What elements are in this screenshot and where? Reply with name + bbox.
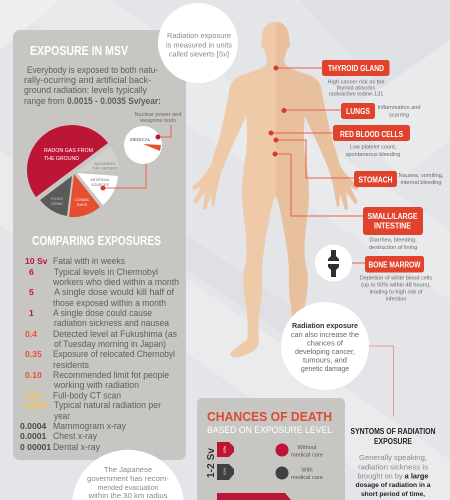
label: small/large intestine: SMALL/LARGE bbox=[368, 212, 418, 221]
label: small/large intestine: Diarrhea, bleeding, bbox=[369, 238, 417, 244]
legend: with medical care: With bbox=[301, 468, 313, 474]
bar: next exposure level bbox=[217, 493, 291, 500]
list: dose descriptions: Recommended limit fot people bbox=[53, 369, 169, 380]
note: nuclear power and weapons tests bbox=[135, 112, 181, 124]
text: symptoms description: brought on by a large bbox=[358, 474, 429, 480]
label: lungs: LUNGS bbox=[346, 107, 371, 116]
list: dose descriptions: of Tuesday morning in Japan) bbox=[54, 338, 166, 349]
list: dose values: 0.4 bbox=[25, 329, 37, 339]
list: dose descriptions: residents bbox=[53, 359, 89, 370]
label: red blood cells bbox=[333, 125, 410, 158]
heading: symptoms of radiation exposure: EXPOSURE bbox=[374, 437, 413, 446]
label: stomach bbox=[354, 171, 444, 187]
heading: exposure in msv: EXPOSURE IN MSV bbox=[30, 43, 128, 58]
text: symptoms description: radiation sickness is bbox=[358, 462, 428, 472]
label: bone marrow: (up to 50% within 48 hours), bbox=[361, 282, 431, 288]
bar: with care: 63% bbox=[223, 468, 227, 475]
list: dose descriptions: A single dose could cause bbox=[53, 307, 152, 318]
bar: without care: 63% bbox=[223, 446, 227, 453]
list: dose descriptions: Dental x-ray bbox=[53, 441, 100, 452]
list: dose values: 5 bbox=[29, 287, 34, 297]
label: red blood cells: Low platelet count, bbox=[350, 144, 397, 150]
label: bone marrow bbox=[360, 256, 432, 302]
heading: symptoms of radiation exposure bbox=[350, 427, 436, 446]
list: dose values: 1 bbox=[29, 308, 34, 318]
list: dose values: 0.0004 bbox=[20, 421, 47, 431]
list: dose descriptions: workers who died within a month bbox=[52, 276, 179, 287]
label: bone marrow: infection bbox=[386, 296, 406, 302]
heading: chances of death: CHANCES OF DEATH bbox=[207, 409, 332, 424]
label: stomach: Nausea, vomiting, bbox=[399, 173, 444, 179]
pie chart: radiation sources: DRINK bbox=[51, 202, 63, 206]
label: bone marrow: BONE MARROW bbox=[368, 260, 421, 270]
label: red blood cells: spontaneous bleeding bbox=[346, 152, 400, 158]
list: dose values: 0.0001 bbox=[20, 431, 47, 441]
circle: medical share: MEDICAL bbox=[130, 137, 151, 142]
label: thyroid gland bbox=[322, 60, 390, 98]
pie chart: radiation sources bbox=[27, 125, 119, 217]
list: dose values: 0.10 bbox=[25, 370, 42, 380]
heading: symptoms of radiation exposure: SYNTOMS OF RADIATION bbox=[350, 427, 436, 436]
text: symptoms description: Generally speaking, bbox=[359, 453, 427, 462]
list: dose values: 0.35 bbox=[25, 349, 42, 359]
callout: sieverts bbox=[158, 3, 238, 83]
label: thyroid gland: radioactive iodine-131 bbox=[329, 92, 383, 98]
connector: artificial sources to medical bbox=[103, 157, 146, 188]
pie chart: radiation sources: RAYS bbox=[77, 203, 87, 207]
pie chart: radiation sources: RADON GAS FROM bbox=[44, 148, 93, 154]
list: dose descriptions: Exposure of relocated Chernobyl bbox=[53, 348, 175, 359]
label: lungs bbox=[341, 103, 420, 119]
pie chart: radiation sources: THE GROUND bbox=[92, 166, 118, 170]
connector: medical to nuclear note bbox=[160, 125, 171, 137]
circle: medical share bbox=[124, 126, 162, 164]
callout: sieverts: Radiation exposure bbox=[167, 31, 231, 40]
pie chart: radiation sources: SOURCES bbox=[91, 183, 109, 187]
text: symptoms description: dosage of radiation in a bbox=[356, 482, 431, 489]
list: dose descriptions: Typical levels in Chermobyl bbox=[54, 266, 158, 277]
list: dose descriptions: year bbox=[54, 410, 70, 421]
icon: bone joint bbox=[315, 244, 352, 282]
callout: sieverts: called sieverts [Sv] bbox=[169, 50, 229, 58]
bar: without care bbox=[217, 442, 234, 457]
callout: radiation exposure cancer: Radiation exposure bbox=[292, 323, 358, 330]
list: dose values: 0.002 bbox=[25, 400, 47, 410]
legend: with medical care bbox=[276, 466, 323, 481]
callout: Japanese evacuation: The Japanese bbox=[104, 465, 152, 474]
list: dose descriptions: A single dose would kill half of bbox=[54, 286, 174, 297]
callout: Japanese evacuation: within the 30 km radius bbox=[87, 491, 168, 500]
label: small/large intestine bbox=[363, 207, 423, 251]
label: small/large intestine: INTESTINE bbox=[374, 222, 412, 230]
callout: Japanese evacuation bbox=[72, 450, 184, 500]
callout: Japanese evacuation: government has recom- bbox=[87, 474, 169, 483]
intro paragraph: range from 0.0015 - 0.0035 Sv/year: bbox=[24, 95, 161, 106]
pie chart: radiation sources: COSMIC bbox=[74, 198, 90, 202]
text: symptoms description: short period of time, bbox=[361, 491, 425, 498]
callout: radiation exposure cancer bbox=[281, 302, 369, 390]
label: red blood cells: RED BLOOD CELLS bbox=[340, 130, 404, 139]
label: thyroid gland: High cancer risk as the bbox=[328, 80, 384, 86]
list: dose descriptions: Detected level at Fukushima (as bbox=[53, 328, 177, 339]
list: dose descriptions: radiation sickness and nausea bbox=[54, 317, 170, 328]
list: dose descriptions: Full-body CT scan bbox=[53, 390, 121, 400]
list: dose descriptions bbox=[52, 255, 179, 452]
label: lungs: Inflammation and bbox=[378, 105, 420, 111]
panel: exposure in mSv bbox=[13, 30, 186, 460]
legend: without medical care bbox=[276, 444, 323, 458]
pie chart: radiation sources: THE GROUND bbox=[44, 156, 79, 162]
panel: chances of death bbox=[197, 398, 345, 500]
label: stomach: STOMACH bbox=[358, 176, 393, 184]
list: dose descriptions: working with radiation bbox=[53, 379, 139, 390]
pie chart: radiation sources: BUILDINGS/ bbox=[94, 162, 117, 166]
legend: without medical care: Without bbox=[298, 445, 317, 451]
axis label: 1-2 Sv: 1-2 Sv bbox=[206, 448, 217, 478]
heading: comparing exposures: COMPARING EXPOSURES bbox=[32, 233, 161, 248]
callout: sieverts: is measured in units bbox=[166, 40, 232, 50]
list: dose values: 0 00001 bbox=[20, 442, 51, 452]
list: dose values: 10 Sv bbox=[25, 256, 48, 266]
label: bone marrow: leading to high risk of bbox=[370, 290, 423, 296]
label: thyroid gland: THYROID GLAND bbox=[328, 64, 384, 73]
list: dose descriptions: Chest x-ray bbox=[53, 430, 97, 441]
note: nuclear power and weapons tests: Nuclear power and bbox=[135, 112, 181, 118]
subheading: based on exposure level: BASED ON EXPOSURE LEVEL bbox=[207, 425, 332, 435]
intro paragraph bbox=[24, 64, 161, 106]
legend: with medical care: medical care bbox=[291, 475, 323, 481]
callout: radiation exposure cancer: developing cancer, bbox=[295, 349, 355, 356]
text: symptoms description bbox=[356, 453, 431, 498]
callout: radiation exposure cancer: chances of bbox=[307, 340, 343, 348]
pie chart: radiation sources: FOOD/ bbox=[51, 197, 64, 201]
dot: artificial sources bbox=[100, 186, 106, 190]
callout: radiation exposure cancer: genetic damage bbox=[301, 366, 349, 373]
human body figure bbox=[192, 22, 359, 357]
list: dose descriptions: Mammogram x-ray bbox=[53, 420, 126, 431]
label: small/large intestine: destruction of lining bbox=[369, 245, 417, 251]
legend: without medical care: medical care bbox=[291, 452, 323, 458]
list: dose descriptions: Fatal with in weeks bbox=[53, 255, 125, 266]
list: dose values: 6 bbox=[29, 267, 34, 277]
label: lungs: scarring bbox=[389, 112, 409, 118]
connector dots bbox=[268, 66, 286, 156]
note: nuclear power and weapons tests: weapons tests bbox=[139, 118, 176, 124]
connector: thyroid bbox=[271, 68, 394, 416]
list: dose descriptions: those exposed within a month bbox=[53, 297, 166, 308]
callout: Japanese evacuation: mended evacuation bbox=[98, 483, 158, 492]
list: dose descriptions: Typical natural radiation per bbox=[54, 399, 161, 410]
intro paragraph: ground radiation: levels typically bbox=[24, 84, 147, 95]
callout: radiation exposure cancer: can also increase the bbox=[291, 332, 359, 339]
intro paragraph: Everybody is exposed to both natu- bbox=[27, 64, 158, 75]
intro paragraph: rally-ocurring and artificial back- bbox=[24, 74, 151, 85]
label: thyroid gland: thyroid absorbs bbox=[337, 86, 375, 92]
list: dose values bbox=[20, 256, 51, 452]
label: stomach: internal bleeding bbox=[400, 180, 442, 186]
pie chart: radiation sources: ARTIFICIAL bbox=[90, 178, 110, 182]
bar: with care bbox=[217, 464, 234, 480]
list: dose values: 0.01 bbox=[25, 390, 42, 400]
label: bone marrow: Depletion of white blood cells bbox=[360, 276, 432, 282]
callout: radiation exposure cancer: tumours, and bbox=[303, 358, 347, 364]
